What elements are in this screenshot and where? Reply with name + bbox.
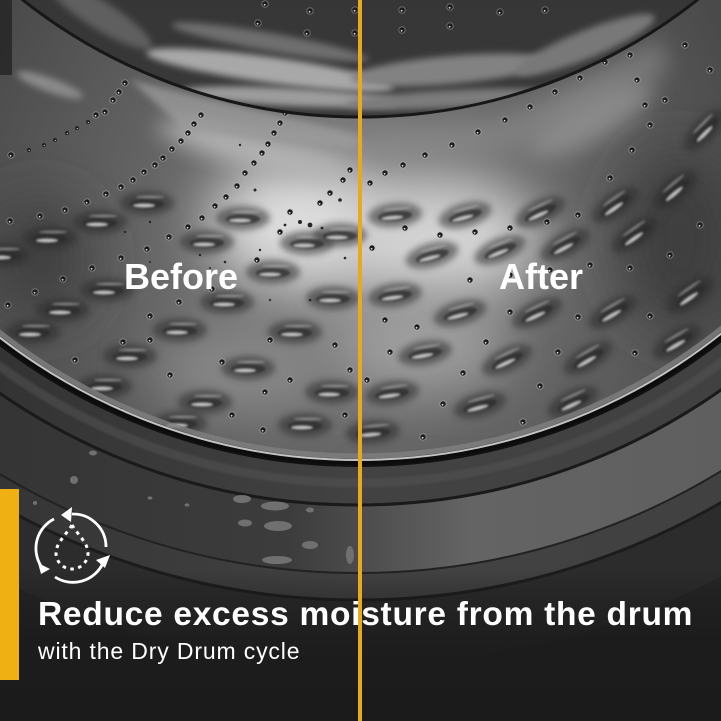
Before label: Before [124,256,238,297]
divider line [358,0,362,721]
drum perforations [4,41,714,441]
water droplets [124,144,346,301]
bottom fade [0,570,721,721]
After label: After [499,256,583,297]
headline: Reduce excess moisture from the drum [38,596,693,633]
left edge shadow of door [0,0,12,75]
large dimples, left [0,191,367,437]
wall reflections [42,0,660,113]
light reflections [0,40,721,410]
drum rim [0,0,721,463]
large dimples, right [345,102,721,446]
drum interior [0,0,721,461]
accent bar [0,489,19,680]
back wall of the drum [0,0,721,117]
subheading: with the Dry Drum cycle [37,638,300,664]
droplets on gasket [33,450,354,564]
icon: water drop in cycle arrows [36,507,110,582]
